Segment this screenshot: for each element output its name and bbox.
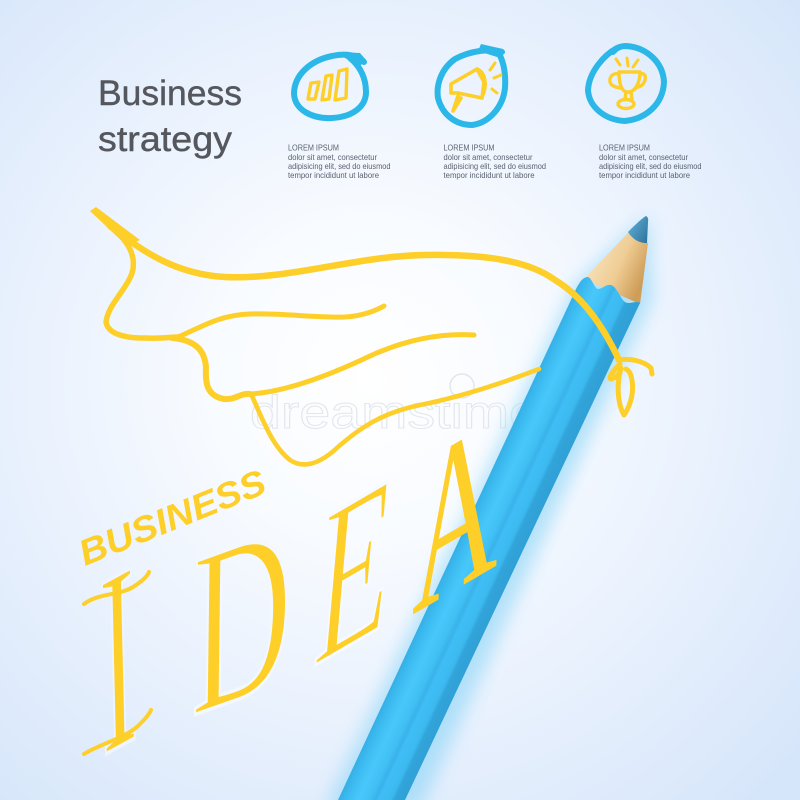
string knot — [610, 359, 652, 415]
heading: idea — [84, 367, 501, 800]
feather one — [178, 306, 384, 337]
pencil lead — [628, 216, 648, 243]
wing lower feather — [252, 369, 539, 464]
text block 1: tempor incididunt ut labore — [288, 170, 379, 180]
feather two — [250, 335, 474, 394]
icon: megaphone in circle — [438, 44, 505, 125]
text block 2: dolor sit amet, consectetur — [444, 152, 533, 162]
text block 2: LOREM IPSUM — [444, 142, 494, 152]
wing left edge — [106, 240, 178, 338]
title — [98, 74, 242, 159]
pencil glow — [325, 216, 652, 800]
watermark: dreamstime — [250, 386, 540, 438]
heading: idea: E — [308, 422, 403, 716]
heading: idea: A — [411, 367, 501, 664]
text block 2 — [444, 142, 546, 180]
wing top line — [110, 226, 619, 360]
title: strategy — [98, 120, 233, 159]
pencil — [338, 216, 648, 800]
text block 1: dolor sit amet, consectetur — [288, 152, 377, 162]
pencil body — [338, 277, 640, 800]
letter I flourishes — [84, 572, 151, 754]
title: Business — [98, 74, 242, 113]
text block 3 — [599, 142, 702, 180]
watermark — [250, 374, 540, 438]
text block 2: tempor incididunt ut labore — [444, 170, 535, 180]
wing tip — [90, 207, 140, 246]
text block 3: adipisicing elit, sed do eiusmod — [599, 161, 702, 171]
icon: trophy in circle — [588, 46, 664, 121]
heading: idea: D — [190, 471, 293, 768]
text block 3: tempor incididunt ut labore — [599, 170, 690, 180]
icon: bar chart in circle — [294, 52, 366, 118]
text block 2: adipisicing elit, sed do eiusmod — [444, 161, 546, 171]
pencil wood tip — [584, 232, 648, 304]
text block 3: dolor sit amet, consectetur — [599, 152, 688, 162]
wing middle edge — [172, 338, 250, 399]
wing drawing — [90, 207, 652, 464]
text block 1: adipisicing elit, sed do eiusmod — [288, 161, 391, 171]
heading: business: BUSINESS — [73, 461, 272, 573]
text block 1 — [288, 142, 391, 180]
text block 1: LOREM IPSUM — [288, 142, 339, 152]
text block 3: LOREM IPSUM — [599, 142, 650, 152]
